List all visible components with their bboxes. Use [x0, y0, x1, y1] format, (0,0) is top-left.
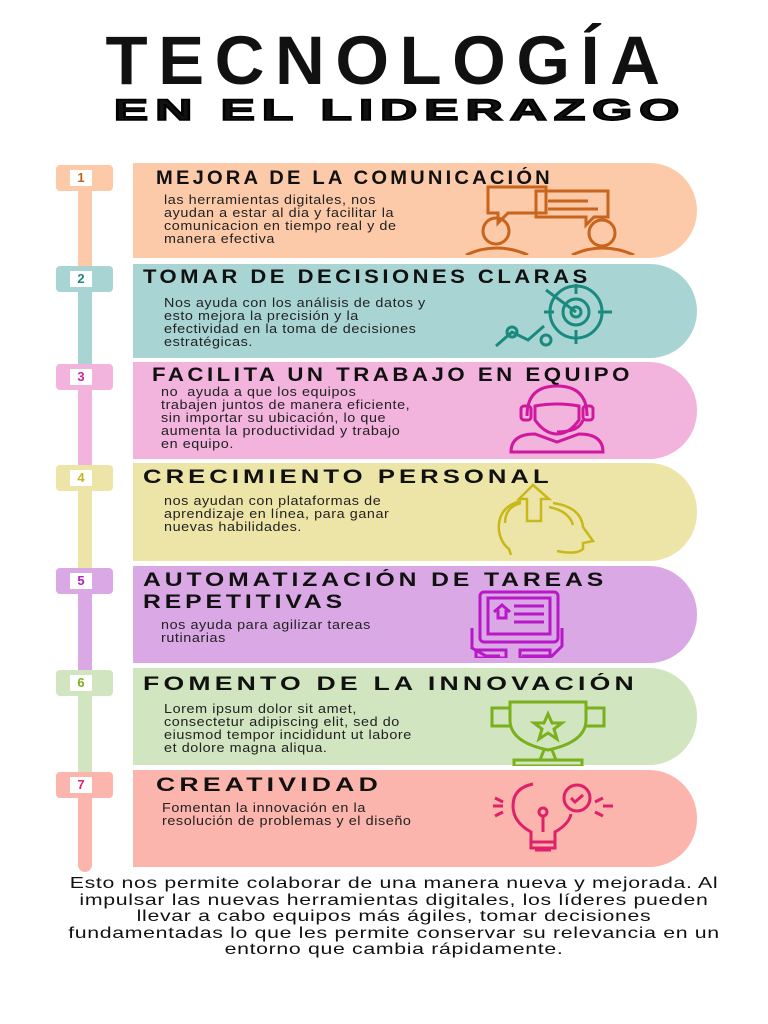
text 7: Fomentan la innovación en la: [162, 801, 366, 815]
number 5: [56, 568, 113, 594]
number 4: [56, 465, 113, 491]
text 5: nos ayuda para agilizar tareas: [161, 618, 371, 632]
heading 2: TOMAR DE DECISIONES CLARAS: [143, 267, 591, 288]
text 2: estratégicas.: [164, 335, 253, 349]
number 3: 3: [77, 369, 85, 384]
number 2: [56, 266, 113, 292]
text 4: nos ayudan con plataformas de: [164, 494, 381, 508]
icon: target: [495, 284, 612, 347]
heading 1: MEJORA DE LA COMUNICACIÓN: [156, 168, 553, 189]
heading 6: FOMENTO DE LA INNOVACIÓN: [143, 674, 638, 695]
text 6: Lorem ipsum dolor sit amet,: [164, 702, 357, 716]
text 1: [164, 193, 397, 246]
text 5: rutinarias: [161, 631, 226, 645]
panel 2: [56, 264, 697, 358]
panel 6: [56, 668, 697, 766]
heading 5: [143, 569, 607, 613]
conclusion text: Esto nos permite colaborar de una manera nueva y mejorada. Al: [70, 875, 718, 892]
text 7: resolución de problemas y el diseño: [162, 814, 411, 828]
text 6: eiusmod tempor incididunt ut labore: [164, 728, 412, 742]
text 1: las herramientas digitales, nos: [164, 193, 376, 207]
text 2: Nos ayuda con los análisis de datos y: [164, 296, 426, 310]
number 3: [56, 364, 113, 390]
panel 1: [56, 163, 697, 258]
text 3: sin importar su ubicación, lo que: [161, 411, 386, 425]
number 4: 4: [77, 470, 85, 485]
text 3: aumenta la productividad y trabajo: [161, 424, 400, 438]
icon: chat people: [465, 186, 634, 255]
number 7: [56, 772, 113, 798]
number 2: 2: [77, 271, 85, 286]
heading 5: AUTOMATIZACIÓN DE TAREAS: [143, 570, 607, 591]
text 3: [161, 385, 410, 451]
panel 7: [56, 770, 697, 867]
subtitle: EN EL LIDERAZGO: [114, 94, 686, 127]
panel 3: [56, 362, 697, 459]
conclusion text: impulsar las nuevas herramientas digitales, los líderes pueden: [79, 892, 709, 908]
number 7: 7: [77, 777, 85, 792]
text 6: [164, 702, 412, 755]
heading 7: CREATIVIDAD: [156, 775, 382, 796]
text 4: aprendizaje en línea, para ganar: [164, 507, 389, 521]
number 1: 1: [77, 170, 85, 185]
number 6: 6: [77, 675, 85, 690]
conclusion text: entorno que cambia rápidamente.: [225, 941, 563, 958]
text 1: manera efectiva: [164, 232, 275, 246]
heading 5: REPETITIVAS: [143, 592, 346, 613]
conclusion text: fundamentadas lo que les permite conservar su relevancia en un: [68, 924, 720, 942]
text 3: trabajen juntos de manera eficiente,: [161, 398, 410, 412]
icon: tablet hands: [470, 590, 564, 658]
text 4: nuevas habilidades.: [164, 520, 302, 534]
panel 4: [56, 463, 697, 561]
number 6: [56, 670, 113, 696]
text 2: efectividad en la toma de decisiones: [164, 322, 416, 336]
text 3: en equipo.: [161, 437, 234, 451]
number 5: 5: [77, 573, 85, 588]
panel 5: [56, 566, 697, 663]
text 1: ayudan a estar al dia y facilitar la: [164, 206, 394, 220]
icon: headset person: [510, 384, 604, 454]
text 1: comunicacion en tiempo real y de: [164, 219, 397, 233]
icon: trophy: [490, 700, 606, 766]
text 4: [164, 494, 389, 534]
timeline bars: [78, 191, 92, 872]
text 7: [162, 801, 411, 828]
text 6: et dolore magna aliqua.: [164, 741, 327, 755]
text 6: consectetur adipiscing elit, sed do: [164, 715, 400, 729]
conclusion text: llevar a cabo equipos más ágiles, tomar decisiones: [137, 908, 651, 925]
icon: bulb: [493, 782, 613, 852]
heading 4: CRECIMIENTO PERSONAL: [143, 467, 553, 488]
text 5: [161, 618, 371, 645]
number 1: [56, 165, 113, 191]
heading 3: FACILITA UN TRABAJO EN EQUIPO: [152, 365, 633, 386]
text 3: no ayuda a que los equipos: [161, 385, 356, 399]
icon: head growth: [498, 483, 596, 556]
text 2: [164, 296, 426, 349]
conclusion text: [68, 875, 720, 958]
title: TECNOLOGÍA: [106, 22, 670, 99]
text 2: esto mejora la precisión y la: [164, 309, 359, 323]
